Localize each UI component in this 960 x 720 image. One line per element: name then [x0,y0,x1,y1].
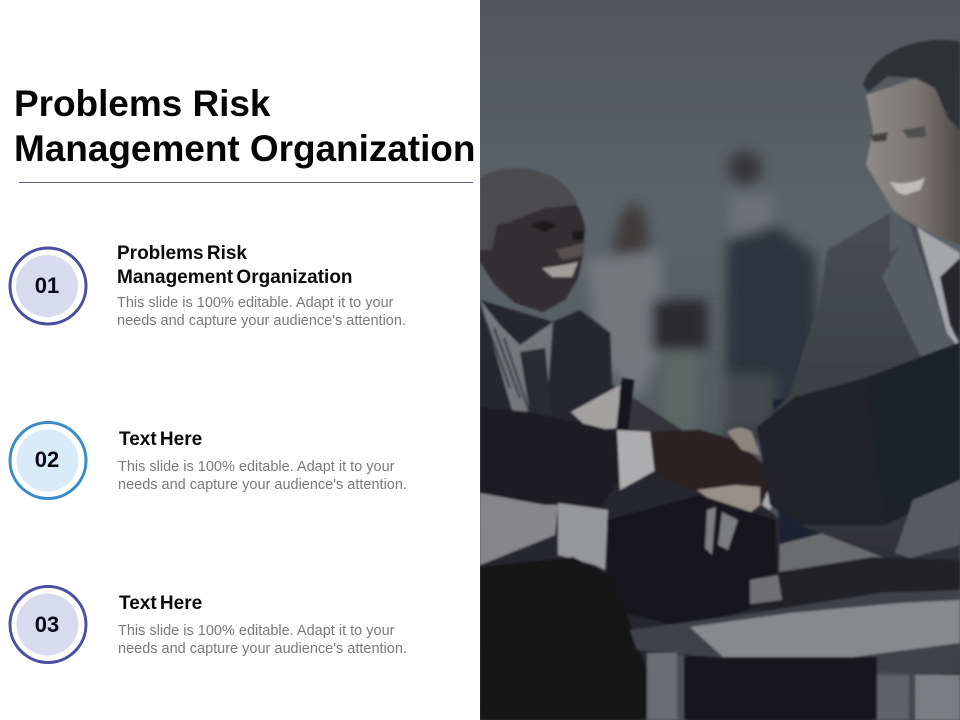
heading 01: Problems Risk [117,243,247,264]
right man: lapel [882,213,958,365]
chair metal [883,500,915,558]
table glass [630,590,960,675]
badge 02 [8,421,88,500]
right man: hair [863,40,960,130]
table bottom shadow [683,657,877,720]
shaking hands [650,430,770,510]
right man: smile [890,178,925,195]
number 03: 03 [35,612,59,637]
dark lap of left man [607,495,778,628]
knee highlight [750,575,782,604]
badge 03 [8,585,88,664]
photo: business handshake [480,0,960,720]
striped tie of left man [705,507,738,555]
panel: item 01 [8,243,406,329]
clipboard [571,385,620,430]
paper on table [690,600,960,660]
right man: jacket [757,213,960,720]
title [14,83,475,169]
description 03 [118,623,407,657]
right man: face [866,75,960,245]
title: Management Organization [14,128,475,169]
description 01: needs and capture your audience's attention. [117,313,406,329]
badge 01 [8,246,88,326]
heading 03: Text Here [119,593,202,614]
description 03: needs and capture your audience's attention. [118,641,407,657]
left man: suit and shirt [480,300,780,720]
title: Problems Risk [14,83,270,124]
heading 02: Text Here [119,429,202,450]
description 01 [117,295,406,329]
panel: item 03 [8,585,407,664]
right man: shirt [917,227,960,350]
jacket hem [895,480,960,558]
left man: nose highlight [556,243,584,260]
left man: hair [480,168,578,250]
left arm sleeve [480,407,620,507]
heading 01 [117,243,353,288]
heading 01: Management Organization [117,267,353,288]
papers at left [480,493,558,565]
description 01: This slide is 100% editable. Adapt it to your [117,295,393,311]
right man: leg [750,557,960,625]
description 02 [118,459,407,493]
blurred background people [585,151,822,440]
left man: eye and brow details [530,221,556,232]
left man: head [480,168,585,312]
left man: smile [542,262,578,277]
left man: knee and leg [480,557,665,720]
striped shirt [480,300,553,418]
description 02: needs and capture your audience's attention. [118,477,407,493]
table legs [647,653,677,720]
divider under title [19,182,473,183]
right man: tie [940,258,960,345]
right cuff [762,455,780,510]
right man: sleeve shadow [757,378,885,525]
dark chair behind handshake [773,385,905,545]
panel: item 02 [8,421,407,500]
number 02: 02 [35,447,59,472]
floor patch [777,518,886,572]
right man: eyes [870,132,888,142]
white cuff [617,430,656,490]
tie [520,348,552,418]
description 02: This slide is 100% editable. Adapt it to your [118,459,394,475]
number 01: 01 [35,273,59,298]
description 03: This slide is 100% editable. Adapt it to your [118,623,394,639]
